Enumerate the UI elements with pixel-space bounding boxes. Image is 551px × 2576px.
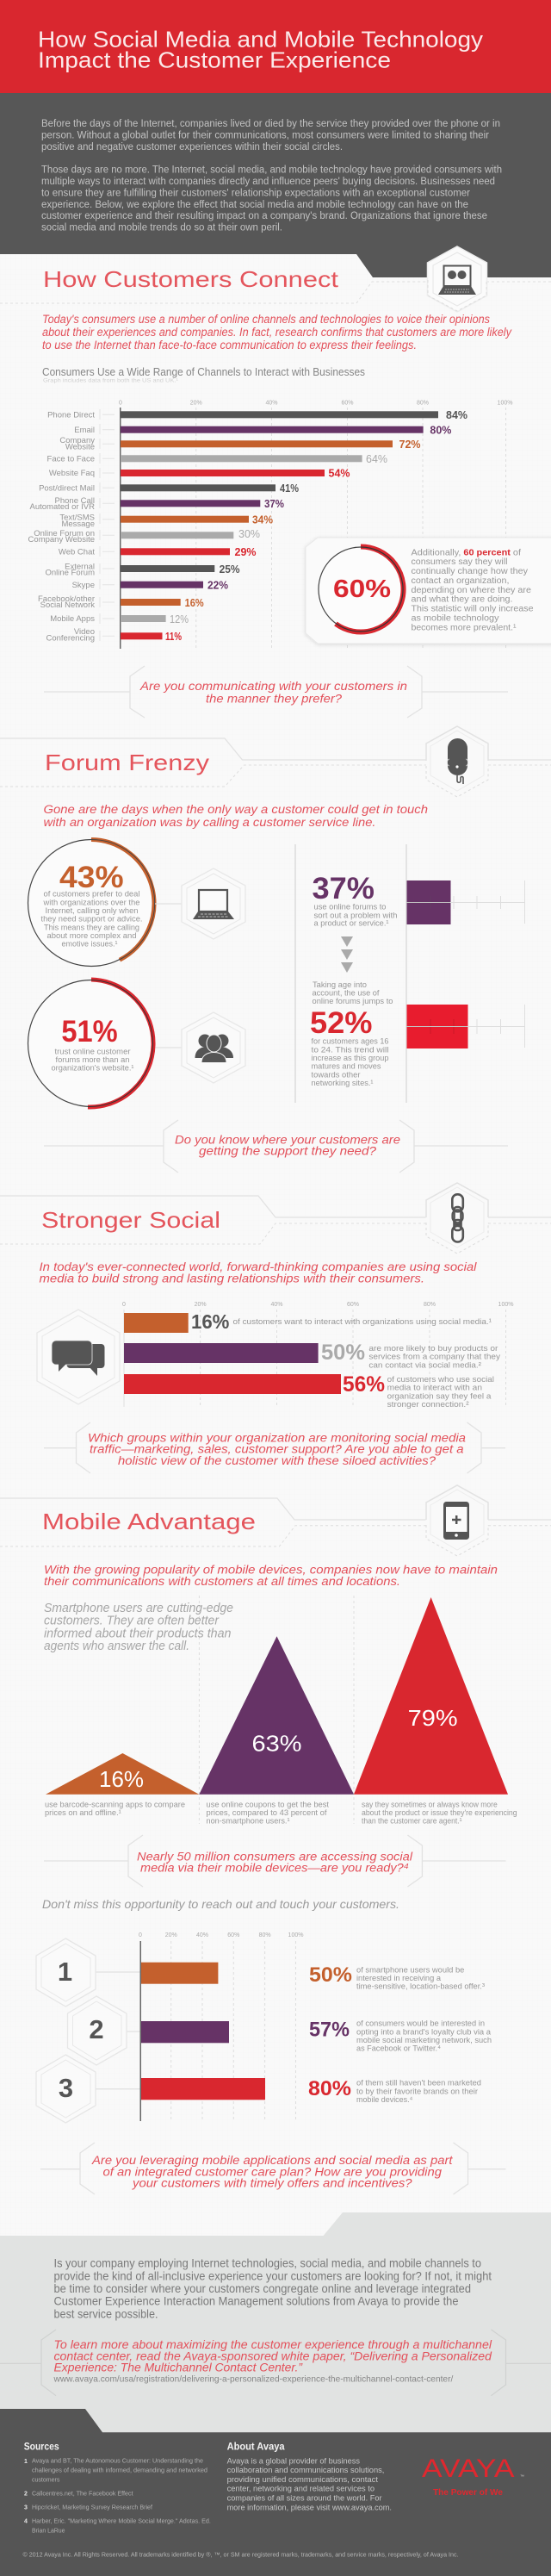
text block: closing copy: best service possible. bbox=[53, 2306, 158, 2320]
logo: Avaya: The Power of We bbox=[433, 2488, 503, 2498]
bar chart: channels: Message bbox=[61, 520, 95, 529]
callout question bbox=[40, 2143, 506, 2194]
bar chart: channels: 80% bbox=[417, 400, 429, 407]
text block: smartphone users bbox=[44, 1602, 233, 1653]
callout question: the manner they prefer? bbox=[206, 693, 343, 706]
bar chart: mobile marketing: 60% bbox=[227, 1932, 239, 1938]
heading: Mobile Advantage bbox=[42, 1509, 256, 1534]
title: How Social Media and Mobile Technology bbox=[38, 26, 483, 52]
chart: 52 percent bar bbox=[406, 1005, 525, 1048]
text block: intro: In today's ever-connected world, forward-thinking companies are using social bbox=[40, 1260, 478, 1273]
bar chart: channels: 20% bbox=[190, 400, 202, 407]
stat: 50 percent smartphone: interested in receiving a bbox=[356, 1974, 442, 1983]
heading: Stronger Social bbox=[41, 1207, 220, 1233]
text block: intro: media to build strong and lasting relationships with their consumers. bbox=[40, 1272, 424, 1285]
bar chart: channels: Email bbox=[74, 426, 95, 435]
stat: 37 percent: sort out a problem with bbox=[313, 911, 398, 920]
bar chart: channels: Website Faq bbox=[49, 469, 95, 478]
stat: 56 percent bbox=[124, 1372, 494, 1409]
text block: intro: about their experiences and companies. In fact, research confirms that customers are more likely bbox=[42, 326, 512, 339]
text block: triangle captions bbox=[45, 1800, 517, 1826]
bar chart: channels: 11% bbox=[165, 631, 182, 643]
bar chart: channels: 16% bbox=[185, 597, 204, 609]
text block: callout copy: depending on where they are bbox=[412, 586, 531, 595]
chart title: Graph includes data from both the US and UK.¹ bbox=[43, 379, 178, 384]
callout question: of an integrated customer care plan? How are you providing bbox=[103, 2165, 443, 2178]
icon: number 3 hexagon: 3 bbox=[59, 2073, 73, 2103]
title bbox=[38, 26, 483, 72]
bar chart: channels: Face to Face bbox=[47, 455, 95, 464]
icon: people bbox=[182, 1012, 245, 1083]
stat: 50 percent smartphone: time-sensitive, location-based offer.³ bbox=[356, 1982, 485, 1992]
bar chart: channels: 80% bbox=[430, 424, 451, 436]
text block: about avaya: About Avaya bbox=[227, 2442, 285, 2452]
text block: sources bbox=[24, 2442, 211, 2534]
bar chart: mobile marketing: 0 bbox=[139, 1932, 142, 1938]
text block: intro: Those days are no more. The Internet, social media, and mobile technology have provided consumers with bbox=[41, 165, 502, 176]
text block: triangle captions: non-smartphone users.¹ bbox=[207, 1817, 289, 1826]
stat: 16 percent bbox=[124, 1310, 492, 1333]
stat: 52 percent: networking sites.¹ bbox=[312, 1079, 374, 1088]
bar chart: channels: Phone Call bbox=[55, 496, 95, 506]
panel: title banner bbox=[0, 0, 551, 93]
stat: 52 percent: towards other bbox=[312, 1070, 360, 1080]
bar chart: channels: 37% bbox=[264, 498, 284, 510]
stat: 16 percent: of customers want to interact with organizations using social media.¹ bbox=[232, 1317, 492, 1327]
bar chart: channels: Skype bbox=[72, 581, 95, 590]
bar chart: channels: 54% bbox=[329, 467, 350, 479]
bar chart: channels: Automated or IVR bbox=[29, 502, 95, 512]
text block: triangle captions: prices, compared to 43 percent of bbox=[207, 1808, 327, 1817]
stat: 56 percent: of customers who use social bbox=[387, 1375, 494, 1384]
stat: 57 percent loyalty: of consumers would be interested in bbox=[356, 2019, 485, 2029]
stat: 52 percent: increase as this group bbox=[312, 1054, 389, 1063]
text block: sources: Avaya and BT, The Autonomous Customer: Understanding the bbox=[32, 2459, 203, 2465]
bar chart: channels: 60% bbox=[341, 400, 354, 407]
panel: 43 percent ring: they need support or advice. bbox=[41, 915, 143, 924]
stat: 80 percent favorite brands: of them still haven't been marketed bbox=[356, 2079, 481, 2088]
bar chart: channels: Company Website bbox=[28, 535, 95, 544]
text block: about avaya: center, networking and related services to bbox=[227, 2485, 375, 2494]
section: Forum Frenzy bbox=[0, 726, 551, 1173]
icon: number 3 hexagon bbox=[36, 2055, 96, 2123]
bar chart: channels: External bbox=[65, 562, 95, 572]
panel: 51 percent ring: organization's website.¹ bbox=[52, 1064, 134, 1073]
text block: closing copy: be time to consider where your customers congregate online and leverage integrated bbox=[53, 2281, 471, 2295]
callout question: getting the support they need? bbox=[199, 1145, 377, 1158]
panel: 43 percent ring: 43% bbox=[59, 861, 124, 894]
text block: callout copy: becomes more prevalent.¹ bbox=[412, 623, 517, 632]
bar chart: channels: 40% bbox=[265, 400, 278, 407]
bar chart: channels: 25% bbox=[220, 563, 240, 576]
callout: white paper bbox=[0, 2330, 551, 2396]
callout question: Nearly 50 million consumers are accessing social bbox=[137, 1850, 413, 1863]
text block: sources: Callcentres.net, The Facebook Effect bbox=[32, 2491, 133, 2497]
stat: 52 percent: matures and moves bbox=[312, 1062, 381, 1072]
icon: number 1 hexagon bbox=[36, 1938, 96, 2007]
text block: intro: their communications with customers at all times and locations. bbox=[44, 1575, 400, 1588]
bar chart: mobile marketing: 20% bbox=[165, 1932, 177, 1938]
chart: 79 percent triangle: 79% bbox=[408, 1705, 458, 1731]
bar chart: channels: Mobile Apps bbox=[50, 614, 95, 624]
icon: number 2 hexagon: 2 bbox=[89, 2014, 104, 2044]
text block: triangle captions: use barcode-scanning apps to compare bbox=[45, 1800, 185, 1808]
chart title: Consumers Use a Wide Range of Channels to Interact with Businesses bbox=[42, 366, 365, 378]
text block: intro: Before the days of the Internet, companies lived or died by the service they provided over the phone or in bbox=[41, 119, 500, 129]
bar chart: mobile marketing bbox=[96, 1932, 303, 2121]
stat: 57 percent loyalty bbox=[309, 2018, 492, 2054]
chart: 60 percent ring bbox=[319, 546, 404, 632]
text block: closing copy: provide the kind of all-inclusive experience your customers are looking for? If not, it might bbox=[53, 2268, 492, 2282]
bar chart: channels: 64% bbox=[366, 453, 387, 465]
panel: 43 percent ring: emotive issues.¹ bbox=[62, 940, 117, 949]
stat: 50 percent: 50% bbox=[321, 1341, 365, 1365]
stat: 57 percent loyalty: opting into a brand's loyalty club via a bbox=[356, 2027, 492, 2037]
bar chart: channels: Text/SMS bbox=[59, 513, 95, 522]
text block: intro: multiple ways to interact with companies directly and influence peers' buying decisions. Businesses need bbox=[41, 177, 495, 187]
arrows: downward triangles bbox=[341, 936, 353, 973]
text block: intro: customer experience and their resulting impact on a company's brand. Organizations that ignore these bbox=[41, 211, 487, 221]
bar chart: channels: Video bbox=[74, 627, 95, 637]
text block: callout copy: This statistic will only increase bbox=[412, 605, 534, 613]
text block: callout copy: continually change how they bbox=[412, 567, 528, 576]
chart: 63 percent triangle bbox=[199, 1636, 354, 1795]
text block: intro: to use the Internet than face-to-face communication to express their feelings. bbox=[42, 339, 417, 352]
icon: number 2 hexagon bbox=[67, 1996, 127, 2065]
icon: mouse bbox=[426, 726, 488, 797]
bar chart: channels: Online Forum on bbox=[34, 529, 95, 538]
callout question: media via their mobile devices—are you ready?⁴ bbox=[140, 1862, 409, 1875]
chart: 60 percent ring: 60% bbox=[333, 576, 391, 603]
bar chart: channels bbox=[28, 400, 512, 649]
panel: 43 percent ring: about more complex and bbox=[46, 931, 136, 941]
panel: closing gray band bbox=[0, 2212, 551, 2438]
stat: 56 percent: organization say they feel a bbox=[387, 1391, 492, 1401]
bar chart: channels: Post/direct Mail bbox=[39, 484, 95, 493]
panel: 51 percent ring bbox=[28, 980, 155, 1107]
text block: triangle captions: prices on and offline.¹ bbox=[45, 1808, 121, 1817]
text block: triangle captions: say they sometimes or always know more bbox=[362, 1800, 498, 1808]
text block: about avaya bbox=[227, 2442, 392, 2513]
bar chart: channels: Social Network bbox=[40, 600, 95, 610]
bar chart: mobile marketing: 80% bbox=[259, 1932, 271, 1938]
text block: callout copy: and what they are doing. bbox=[412, 595, 513, 605]
logo: Avaya: AVAYA bbox=[422, 2455, 515, 2483]
section: Mobile Advantage bbox=[0, 1485, 551, 2194]
stat: 50 percent smartphone bbox=[309, 1963, 485, 1992]
bar chart: channels: 41% bbox=[280, 482, 299, 495]
stat: 57 percent loyalty: mobile social marketing network, such bbox=[356, 2036, 492, 2045]
bar chart: channels: 100% bbox=[498, 400, 512, 407]
callout: 60 percent bbox=[306, 538, 551, 644]
icon: phone bbox=[426, 1485, 488, 1556]
text block: intro: to ensure they are fulfilling their customers' relationship expectations with an exceptional customer bbox=[41, 188, 470, 198]
bar chart: channels: 0 bbox=[119, 400, 122, 407]
panel: 51 percent ring: trust online customer bbox=[55, 1047, 131, 1056]
stat: 50 percent: services from a company that they bbox=[368, 1353, 500, 1362]
section: How Customers Connect bbox=[0, 246, 551, 718]
text block: sources: Harber, Eric. "Marketing Where Mobile Social Merge." Adotas. Ed. bbox=[32, 2518, 211, 2524]
stat: 80 percent favorite brands: to by their favorite brands on their bbox=[356, 2087, 478, 2096]
stat: 37 percent bbox=[312, 872, 398, 929]
chart: 79 percent triangle bbox=[354, 1597, 508, 1795]
stat: 50 percent: are more likely to buy products or bbox=[368, 1344, 498, 1353]
text block: callout copy: consumers say they will bbox=[412, 557, 508, 567]
bar chart: social stats: 20% bbox=[195, 1302, 207, 1308]
stat: 80 percent favorite brands: mobile devices.⁴ bbox=[356, 2095, 412, 2105]
chart: 16 percent triangle: 16% bbox=[99, 1766, 144, 1792]
panel: 43 percent ring: This means they are calling bbox=[44, 923, 139, 932]
text block: about avaya: collaboration and communications solutions, bbox=[227, 2466, 384, 2475]
icon: laptop bbox=[182, 868, 245, 939]
text block: callout copy: contact an organization, bbox=[412, 576, 510, 586]
text block: about avaya: companies of all sizes around the world. For bbox=[227, 2494, 382, 2504]
text block: closing copy bbox=[53, 2256, 492, 2320]
stat: 50 percent smartphone: of smartphone users would be bbox=[356, 1965, 464, 1975]
logo: Avaya: ™ bbox=[520, 2474, 524, 2480]
text block: intro bbox=[43, 803, 428, 829]
text block: about avaya: more information, please visit www.avaya.com. bbox=[227, 2504, 392, 2513]
text block: intro: Gone are the days when the only way a customer could get in touch bbox=[43, 803, 428, 816]
chart: 37 percent bar bbox=[406, 880, 525, 924]
callout question bbox=[44, 1422, 505, 1473]
stat: 52 percent: to 24. This trend will bbox=[312, 1045, 389, 1055]
callout question: your customers with timely offers and incentives? bbox=[132, 2177, 412, 2190]
text block: about avaya: Avaya is a global provider of business bbox=[227, 2456, 360, 2466]
text block: sources: challenges of dealing with informed, demanding and networked bbox=[32, 2467, 207, 2473]
stat: 52 percent bbox=[310, 980, 393, 1088]
text block: triangle captions: than the customer care agent.¹ bbox=[362, 1817, 461, 1826]
text block: smartphone users: customers. They are often better bbox=[44, 1615, 220, 1628]
text block: intro: with an organization was by calling a customer service line. bbox=[43, 816, 375, 829]
bar chart: social stats: 40% bbox=[270, 1302, 283, 1308]
callout: white paper: Experience: The Multichannel Contact Center.” bbox=[53, 2361, 303, 2374]
stat: 37 percent: 37% bbox=[312, 872, 375, 905]
text block: triangle captions: about the product or issue they're experiencing bbox=[362, 1808, 517, 1817]
bar chart: channels: Website bbox=[65, 442, 95, 451]
bar chart: channels: 30% bbox=[238, 528, 260, 540]
bar chart: channels: 12% bbox=[170, 613, 189, 625]
text block: intro: Today's consumers use a number of online channels and technologies to voice their opinions bbox=[42, 313, 490, 326]
callout: white paper: contact center, read the Avaya-sponsored white paper, “Delivering a Personalized bbox=[53, 2349, 492, 2362]
text block: sources: 2 bbox=[24, 2492, 28, 2497]
title: Impact the Customer Experience bbox=[38, 47, 391, 72]
stat: 56 percent: stronger connection.² bbox=[387, 1400, 469, 1409]
bar chart: social stats: 80% bbox=[424, 1302, 436, 1308]
text block: smartphone users: agents who answer the call. bbox=[44, 1640, 189, 1653]
callout question bbox=[44, 666, 508, 718]
text block: opportunity: Don't miss this opportunity to reach out and touch your customers. bbox=[42, 1897, 399, 1911]
bar chart: mobile marketing: 100% bbox=[288, 1932, 303, 1938]
bar chart: social stats bbox=[122, 1302, 513, 1409]
bar chart: channels: Facebook/other bbox=[38, 594, 95, 604]
bar chart: channels: Company bbox=[59, 436, 95, 445]
bar chart: channels: Phone Direct bbox=[47, 410, 95, 420]
text block: intro: With the growing popularity of mobile devices, companies now have to maintain bbox=[44, 1564, 498, 1577]
stat: 52 percent: 52% bbox=[310, 1006, 372, 1040]
section: Stronger Social bbox=[0, 1183, 551, 1473]
bar chart: channels: 72% bbox=[399, 439, 420, 451]
stat: 50 percent: can contact via social media.² bbox=[368, 1360, 481, 1370]
bar chart: social stats: 60% bbox=[347, 1302, 359, 1308]
callout question bbox=[44, 1120, 508, 1173]
copyright: © 2012 Avaya Inc. All Rights Reserved. All trademarks identified by ®, ™, or SM are registered marks, trademarks, and service marks, respectively, of Avaya Inc. bbox=[22, 2551, 459, 2558]
panel: 43 percent ring: of customers prefer to deal bbox=[43, 890, 139, 899]
stat: 52 percent: online forums jumps to bbox=[312, 997, 393, 1006]
text block: intro bbox=[42, 313, 512, 352]
bar chart: mobile marketing: 40% bbox=[196, 1932, 208, 1938]
text block: about avaya: providing unified communications, contact bbox=[227, 2475, 378, 2485]
stat: 56 percent: media to interact with an bbox=[387, 1384, 482, 1393]
stat: 16 percent: 16% bbox=[191, 1310, 229, 1333]
text block: intro bbox=[41, 119, 502, 233]
heading: How Customers Connect bbox=[43, 266, 339, 292]
callout question: Are you leveraging mobile applications and social media as part bbox=[91, 2154, 454, 2167]
stat: 50 percent smartphone: 50% bbox=[309, 1963, 352, 1987]
stat: 50 percent bbox=[124, 1341, 500, 1370]
bar chart: channels: 22% bbox=[207, 579, 228, 591]
callout question: Which groups within your organization are monitoring social media bbox=[88, 1431, 467, 1444]
text block: callout copy: as mobile technology bbox=[412, 613, 499, 623]
stat: 80 percent favorite brands: 80% bbox=[308, 2077, 351, 2100]
icon: chain bbox=[426, 1183, 488, 1254]
text block: intro: person. Without a global outlet for their communications, most consumers were limited to sharing their bbox=[41, 131, 489, 141]
text block: smartphone users: informed about their products than bbox=[44, 1627, 231, 1640]
bar chart: channels: 34% bbox=[252, 513, 273, 526]
text block: triangle captions: use online coupons to get the best bbox=[207, 1800, 329, 1808]
text block: sources: Brian LaRue bbox=[32, 2528, 65, 2534]
text block: intro: social media and mobile trends do so at their own peril. bbox=[41, 222, 282, 233]
callout: white paper: To learn more about maximizing the customer experience through a multichannel bbox=[53, 2338, 492, 2351]
text block: sources: 4 bbox=[24, 2519, 28, 2524]
panel: 43 percent ring bbox=[28, 839, 155, 967]
logo: Avaya bbox=[422, 2455, 524, 2498]
text block: sources: 1 bbox=[24, 2459, 28, 2465]
panel: 43 percent ring: Internet, calling only when bbox=[45, 906, 138, 916]
stat: 37 percent: use online forums to bbox=[313, 903, 386, 912]
text block: callout copy bbox=[412, 548, 534, 632]
panel: 43 percent ring: with organizations over the bbox=[43, 898, 140, 907]
panel: 51 percent ring: forums more than an bbox=[55, 1055, 129, 1065]
text block: sources: Sources bbox=[24, 2442, 59, 2452]
text block: smartphone users: Smartphone users are cutting-edge bbox=[44, 1602, 233, 1615]
chart: 63 percent triangle: 63% bbox=[251, 1731, 301, 1757]
callout question bbox=[44, 1835, 506, 1887]
text block: sources: Hipcricket, Marketing Survey Research Brief bbox=[32, 2504, 152, 2511]
text block: callout copy: Additionally, 60 percent of bbox=[412, 548, 521, 557]
stat: 56 percent: 56% bbox=[343, 1372, 385, 1397]
stat: 52 percent: for customers ages 16 bbox=[312, 1037, 389, 1047]
chart: 16 percent triangle bbox=[46, 1753, 199, 1795]
icon: chat bubbles bbox=[37, 1310, 120, 1404]
text block: intro bbox=[40, 1260, 478, 1285]
stat: 37 percent: a product or service.¹ bbox=[313, 919, 389, 929]
callout question: holistic view of the customer with these siloed activities? bbox=[118, 1454, 436, 1467]
callout question: traffic—marketing, sales, customer support? Are you able to get a bbox=[90, 1443, 464, 1456]
stat: 57 percent loyalty: as Facebook or Twitter.⁴ bbox=[356, 2044, 441, 2054]
text block: intro: experience. Below, we explore the effect that social media and mobile technology can have on the bbox=[41, 200, 468, 210]
text block: closing copy: Is your company employing Internet technologies, social media, and mobile channels to bbox=[53, 2256, 481, 2270]
stat: 57 percent loyalty: 57% bbox=[309, 2018, 350, 2041]
stat: 52 percent: account, the use of bbox=[312, 989, 380, 998]
icon: laptop with faces bbox=[427, 246, 487, 312]
bar chart: channels: Online Forum bbox=[45, 569, 95, 577]
heading: Forum Frenzy bbox=[45, 750, 209, 775]
text block: intro bbox=[44, 1564, 498, 1588]
bar chart: channels: 29% bbox=[234, 546, 257, 558]
bar chart: social stats: 0 bbox=[122, 1302, 126, 1308]
text block: closing copy: Customer Experience Interaction Management solutions from Avaya to provide the bbox=[53, 2294, 459, 2308]
callout question: Are you communicating with your customers in bbox=[139, 680, 407, 693]
callout question: Do you know where your customers are bbox=[175, 1133, 400, 1146]
panel: footer bbox=[0, 2409, 551, 2576]
bar chart: channels: Web Chat bbox=[59, 548, 95, 557]
stat: 80 percent favorite brands bbox=[308, 2077, 481, 2105]
bar chart: social stats: 100% bbox=[498, 1302, 513, 1308]
text block: sources: customers bbox=[32, 2477, 60, 2483]
callout: white paper: www.avaya.com/usa/registration/delivering-a-personalized-experience-the-multichannel-contact-center/ bbox=[53, 2374, 453, 2384]
panel: dark intro background bbox=[0, 86, 551, 277]
stat: 52 percent: Taking age into bbox=[313, 980, 367, 990]
panel: 51 percent ring: 51% bbox=[61, 1015, 118, 1048]
chart title bbox=[42, 366, 365, 384]
bar chart: channels: 84% bbox=[446, 409, 467, 421]
icon: number 1 hexagon: 1 bbox=[58, 1957, 72, 1987]
text block: sources: 3 bbox=[24, 2505, 28, 2511]
bar chart: channels: Conferencing bbox=[46, 634, 95, 643]
text block: intro: positive and negative customer experiences within their social circles. bbox=[41, 142, 343, 152]
